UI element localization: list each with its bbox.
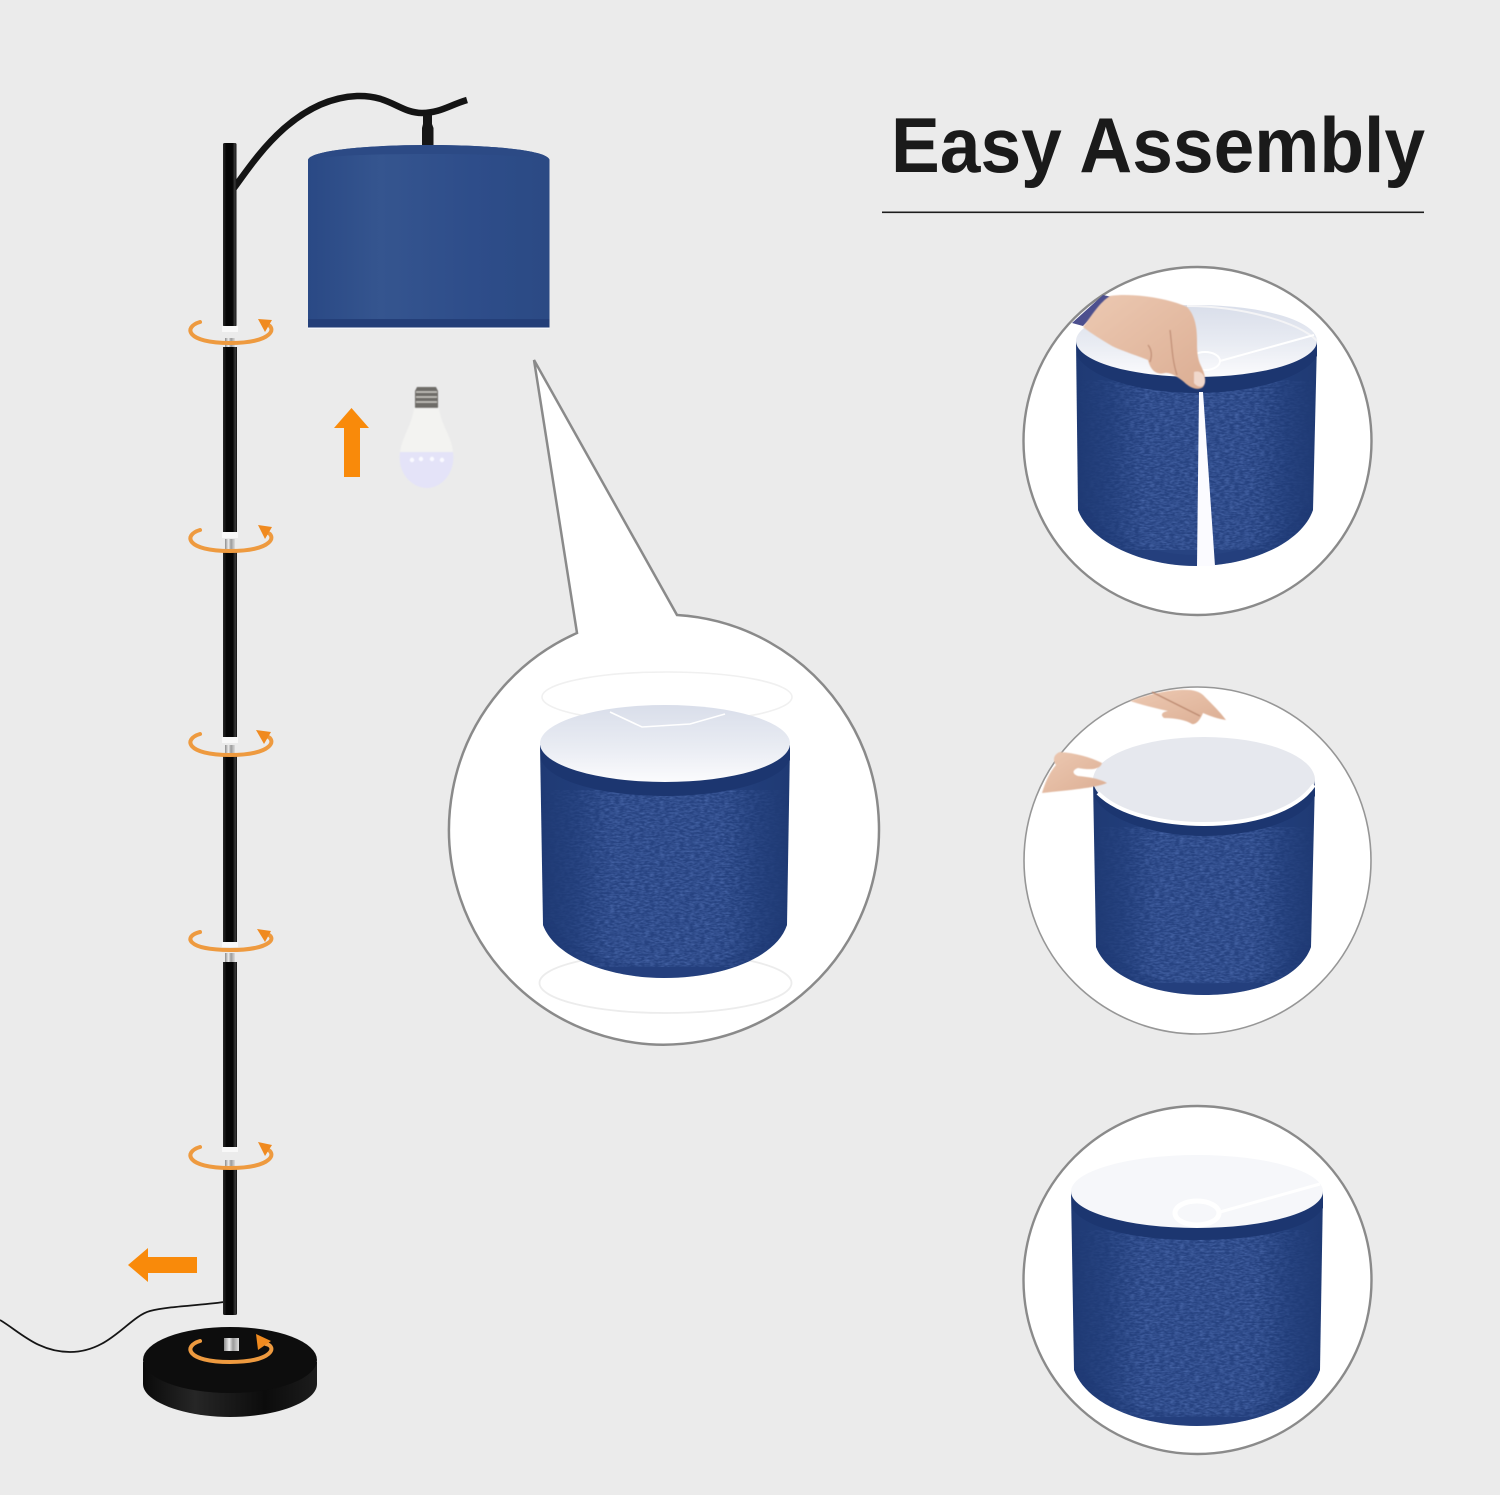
circle frame [1024,687,1371,1034]
circle frame [1024,1106,1372,1454]
rotate arrow 6 on base [190,1334,271,1362]
rotate arrow 3 [190,730,271,755]
pole connectors [222,326,238,1168]
icon: light bulb [400,387,453,488]
panel: finished lamp shade [1024,1106,1372,1454]
sleeve [1072,295,1112,326]
rotate arrow 1 [190,319,272,343]
fabric shade with slit [1076,305,1317,566]
top ring [542,672,792,722]
left hand [1042,752,1107,793]
bottom ring [540,953,792,1013]
lamp base [143,1327,317,1417]
callout bubble with tail [449,360,879,1045]
top hand [1130,690,1226,724]
panel: fit the liner into shade [1024,687,1371,1034]
curved lamp arm [234,96,467,188]
floor lamp exploded view [0,96,550,1417]
title: Easy Assembly: Easy Assembly [891,101,1425,189]
rotate arrow 2 [190,525,272,551]
callout: lamp shade with rings [449,360,879,1045]
fabric shade [540,705,790,978]
rotate arrow 5 [190,1142,272,1168]
panel: pull out the liner [1024,267,1372,615]
power cord [0,1302,224,1352]
drum lamp shade [308,145,550,329]
arrow: left towards plug [128,1248,197,1282]
rotation arrows [190,319,272,1362]
hand [1083,295,1205,389]
lamp pole segments [223,143,237,1315]
rotate arrow 4 [190,929,271,950]
circle frame [1024,267,1372,615]
arrow: up towards shade [334,408,369,477]
fabric shade [1093,737,1315,995]
fabric shade [1071,1155,1323,1426]
lamp socket stem [422,115,434,146]
